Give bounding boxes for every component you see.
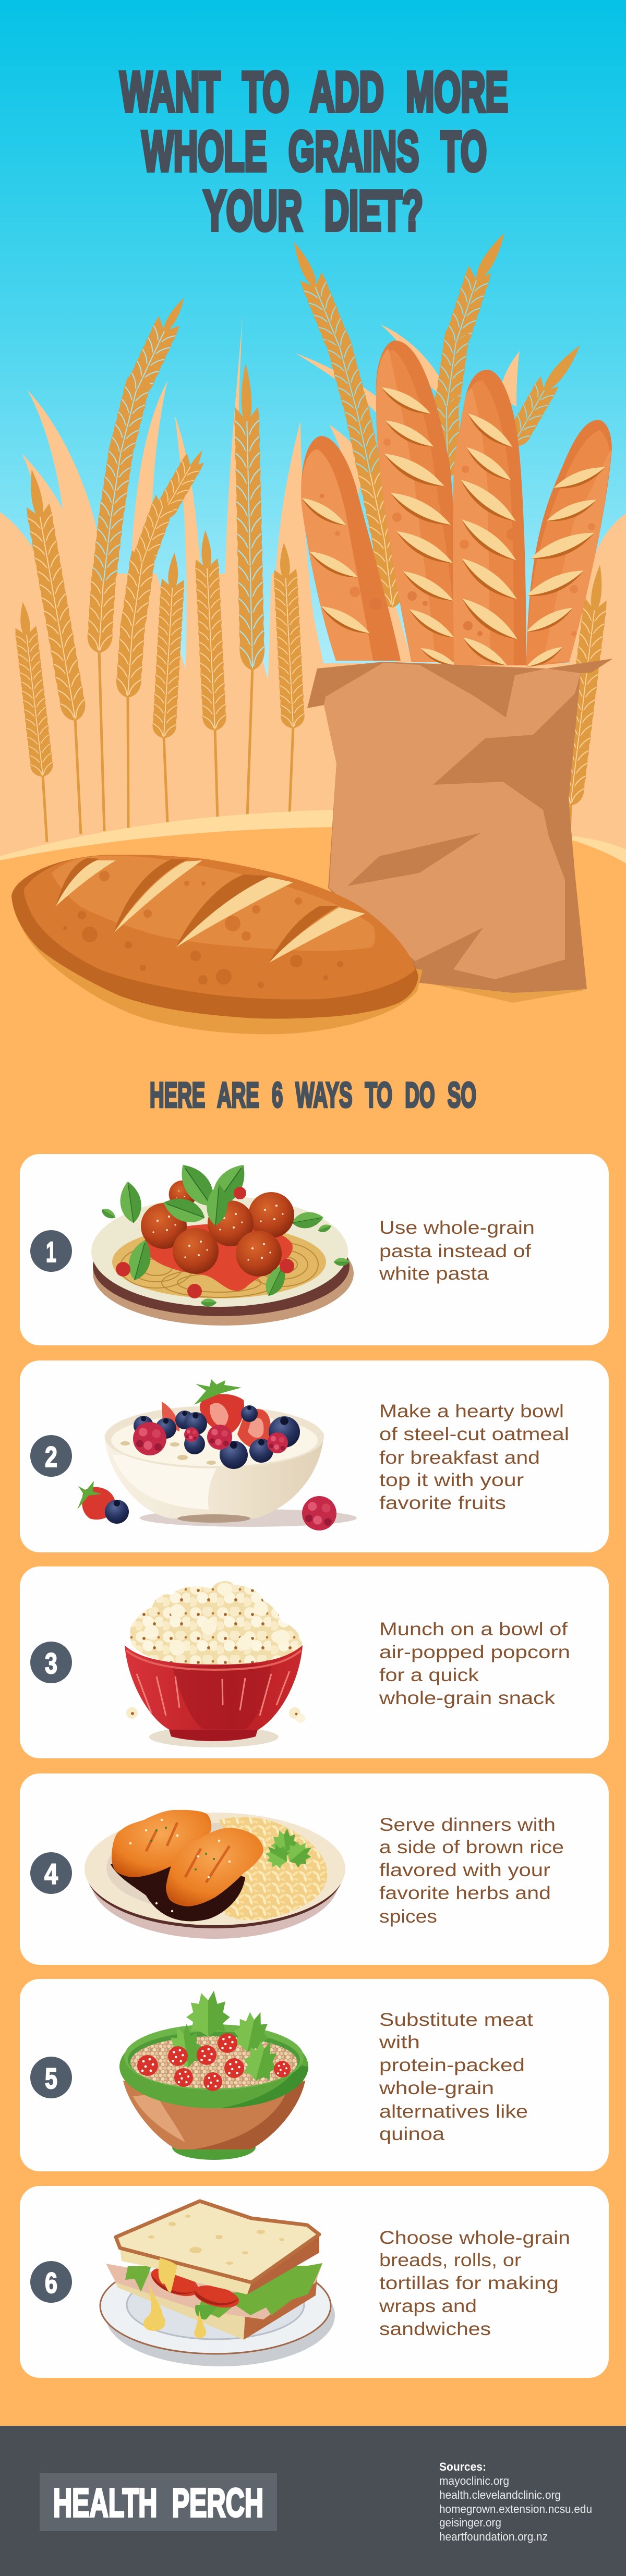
panel: card 1 whole-grain pasta (20, 1154, 609, 1345)
number badge 5: 5 (45, 2062, 57, 2095)
panel: card 6 sandwich (20, 2186, 609, 2378)
text: favorite herbs and (379, 1883, 551, 1903)
text: spices (379, 1906, 437, 1927)
wheat ear 2 (19, 467, 88, 723)
text: Serve dinners with (379, 1815, 556, 1835)
text: Substitute meat (379, 2010, 533, 2030)
number badge 3: 3 (45, 1647, 57, 1680)
icon: quinoa salad bowl (119, 1991, 308, 2160)
logo: Health Perch (40, 2473, 277, 2531)
text: sandwiches (379, 2319, 491, 2339)
number badge 5 (30, 2057, 72, 2098)
text (379, 2228, 570, 2339)
number badge 4: 4 (44, 1857, 58, 1890)
text: Choose whole-grain (379, 2228, 570, 2248)
ground hill highlight (0, 810, 626, 886)
wheat ear 1 (11, 601, 54, 778)
number badge 4 (30, 1852, 72, 1894)
text: whole-grain snack (379, 1688, 556, 1708)
text: for a quick (379, 1665, 479, 1685)
text (379, 1401, 569, 1513)
icon: popcorn in red bowl (125, 1581, 305, 1747)
icon: sandwich on plate (100, 2201, 335, 2366)
number badge 6 (30, 2261, 72, 2303)
text: pasta instead of (379, 1241, 531, 1261)
wheat ear behind bread 1 (290, 240, 405, 609)
number badge 6: 6 (45, 2266, 57, 2299)
text: flavored with your (379, 1860, 550, 1880)
wheat field scene (0, 230, 626, 886)
icon: chicken and rice plate (85, 1810, 345, 1939)
background sky (0, 0, 626, 688)
number badge 2 (30, 1435, 72, 1477)
number badge 1 (30, 1230, 72, 1272)
wheat ear 8 (272, 542, 305, 729)
number badge 1: 1 (46, 1235, 56, 1268)
panel: card 2 steel-cut oatmeal (20, 1360, 609, 1552)
paper bag (307, 659, 613, 993)
text: Use whole-grain (379, 1218, 535, 1238)
text: quinoa (379, 2124, 445, 2144)
text (379, 2010, 533, 2144)
sources list: homegrown.extension.ncsu.edu (439, 2502, 592, 2516)
wheat ear 7 (233, 363, 265, 671)
text: wraps and (379, 2296, 477, 2316)
panel: card 3 air-popped popcorn (20, 1566, 609, 1758)
icon: oatmeal bowl with berries (77, 1379, 357, 1530)
title (120, 60, 508, 242)
text: favorite fruits (379, 1493, 506, 1513)
text (379, 1815, 564, 1927)
wheat ear 4 (115, 448, 206, 699)
text: a side of brown rice (379, 1837, 564, 1857)
text: top it with your (379, 1470, 524, 1490)
text: protein-packed (379, 2055, 525, 2075)
wheat ear 6 (194, 530, 227, 731)
text: for breakfast and (379, 1448, 540, 1468)
bag shadow (415, 980, 587, 1003)
sources list: health.clevelandclinic.org (439, 2488, 561, 2501)
wheat stems (43, 650, 571, 842)
title: YOUR DIET? (203, 179, 423, 242)
panel: card 5 quinoa (20, 1979, 609, 2171)
baguette 3 (453, 370, 526, 672)
footer band (0, 2426, 626, 2576)
orange ground and page background (0, 827, 626, 2430)
logo: Health Perch: HEALTH PERCH (53, 2481, 263, 2525)
text: breads, rolls, or (379, 2250, 521, 2270)
text: Munch on a bowl of (379, 1619, 568, 1639)
wheat ear behind bread 3 (503, 342, 585, 451)
text: with (379, 2032, 420, 2052)
text: Make a hearty bowl (379, 1401, 564, 1421)
text: white pasta (379, 1263, 489, 1284)
baguette 2 (376, 341, 458, 670)
peach grass blades and hills (0, 314, 626, 886)
wheat ear 5 (152, 552, 186, 739)
baguette 1 (298, 436, 401, 661)
number badge 2: 2 (45, 1440, 57, 1473)
text: alternatives like (379, 2101, 528, 2122)
text: whole-grain (379, 2078, 494, 2098)
text: air-popped popcorn (379, 1642, 570, 1662)
text: tortillas for making (379, 2273, 559, 2293)
icon: spaghetti and meatballs (91, 1158, 354, 1326)
sources list: heartfoundation.org.nz (439, 2530, 548, 2543)
wheat ear behind bread 2 (434, 230, 509, 477)
round bread loaf (11, 855, 423, 1034)
sources list: Sources: (439, 2460, 486, 2473)
number badge 3 (30, 1642, 72, 1683)
text (379, 1619, 570, 1708)
text (379, 1218, 535, 1284)
baguette 4 (524, 420, 612, 672)
wheat ear 3 tall curved (87, 296, 188, 653)
sources list: mayoclinic.org (439, 2474, 509, 2487)
sources list (439, 2460, 592, 2543)
wheat ear right (559, 563, 612, 807)
panel: card 4 brown rice dinner (20, 1773, 609, 1965)
sources list: geisinger.org (439, 2516, 501, 2529)
text: of steel-cut oatmeal (379, 1424, 569, 1444)
